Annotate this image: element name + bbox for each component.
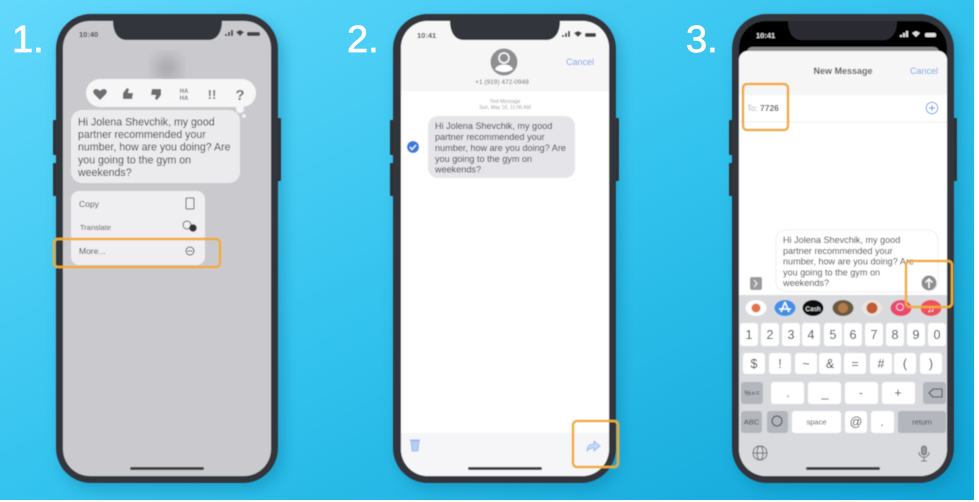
symbol row: ~ xyxy=(802,357,810,371)
context menu xyxy=(71,191,205,265)
step number 3: 3. xyxy=(686,19,718,61)
highlight: More option xyxy=(54,239,220,267)
message timestamp xyxy=(479,99,531,111)
icon: trash xyxy=(410,440,420,451)
app row xyxy=(746,300,942,316)
phone 2: message selected xyxy=(390,14,621,490)
number row: 8 xyxy=(892,328,899,342)
composed message xyxy=(776,230,938,292)
composed message: number, how are you doing? Are xyxy=(783,256,914,266)
bottom key row: . xyxy=(880,415,884,429)
message bubble: number, how are you doing? Are xyxy=(78,142,231,154)
symbol row: # xyxy=(878,357,885,371)
selected check xyxy=(407,141,419,153)
highlight: forward button xyxy=(573,421,618,467)
symbol row xyxy=(743,353,942,374)
number row: 4 xyxy=(808,328,815,342)
step number 2: 2. xyxy=(347,19,379,61)
recipient field: To: xyxy=(747,104,758,113)
message timestamp: Sun, May 16, 11:06 AM xyxy=(479,105,531,111)
punctuation row: - xyxy=(859,386,863,400)
message bubble: number, how are you doing? Are xyxy=(435,143,566,153)
punctuation row: + xyxy=(894,386,902,400)
phone 1: message context menu: 10:40 xyxy=(79,30,98,39)
number row: 5 xyxy=(830,328,837,342)
message bubble: Hi Jolena Shevchik, my good xyxy=(435,121,552,131)
phone 1: message context menu xyxy=(53,14,284,490)
phone 3: new message compose xyxy=(729,14,960,490)
number row: 3 xyxy=(788,328,795,342)
bottom key row: return xyxy=(912,418,932,426)
phone 2: message selected: 10:41 xyxy=(417,31,436,40)
home indicator xyxy=(468,467,542,470)
composed message: weekends? xyxy=(782,278,829,288)
punctuation row: _ xyxy=(821,386,830,400)
app row: ♫ xyxy=(927,304,935,315)
message bubble: weekends? xyxy=(77,167,132,179)
number row xyxy=(740,323,946,346)
composed message: partner recommended your xyxy=(783,246,893,256)
highlight: recipient field xyxy=(743,84,788,130)
blurred contact avatar xyxy=(154,55,180,81)
cancel link: Cancel xyxy=(910,66,938,76)
message bubble xyxy=(71,110,240,183)
keyboard xyxy=(739,295,947,476)
number row: 6 xyxy=(850,328,857,342)
reaction bar: HA xyxy=(180,96,189,102)
icon: expand apps xyxy=(750,277,762,290)
header with contact: Cancel xyxy=(566,57,594,67)
symbol row: = xyxy=(851,357,859,371)
number row: 1 xyxy=(746,328,753,342)
icon: globe xyxy=(753,446,767,460)
reaction bar xyxy=(86,79,256,118)
punctuation row: . xyxy=(786,386,790,400)
recipient field xyxy=(747,102,938,114)
icon: forward arrow xyxy=(587,441,600,451)
app row: Cash xyxy=(805,306,821,313)
reaction bar: HA xyxy=(180,89,189,95)
context menu: More... xyxy=(79,246,105,256)
symbol row: & xyxy=(826,357,835,371)
home indicator xyxy=(806,467,880,470)
compose sheet xyxy=(739,51,947,476)
phone 3: new message compose: 10:41 xyxy=(756,31,775,40)
message bubble: weekends? xyxy=(434,164,481,174)
punctuation row xyxy=(741,382,946,404)
message bubble: you going to the gym on xyxy=(435,154,532,164)
header with contact xyxy=(401,21,609,91)
sheet title: New Message xyxy=(813,66,873,76)
icon: microphone xyxy=(919,446,929,461)
message timestamp: Text Message xyxy=(490,99,521,105)
message bubble: partner recommended your xyxy=(435,132,545,142)
bottom key row: space xyxy=(806,418,827,426)
home indicator xyxy=(130,467,204,470)
symbol row: ) xyxy=(929,357,933,371)
bottom key row xyxy=(741,411,946,433)
highlight: send button xyxy=(906,261,952,307)
header with contact: +1 (919) 472-0948 xyxy=(475,79,529,86)
punctuation row: %+= xyxy=(744,388,760,398)
symbol row: $ xyxy=(751,357,758,371)
recipient field: 7726 xyxy=(760,103,779,113)
composed message: Hi Jolena Shevchik, my good xyxy=(783,235,900,245)
number row: 9 xyxy=(913,328,920,342)
number row: 2 xyxy=(767,328,774,342)
message bubble: Hi Jolena Shevchik, my good xyxy=(78,116,215,128)
number row: 0 xyxy=(934,328,941,342)
bottom key row: @ xyxy=(850,415,862,429)
bottom toolbar xyxy=(401,433,609,476)
symbol row: ( xyxy=(903,357,908,371)
reaction bar: ? xyxy=(235,87,245,104)
context menu: Copy xyxy=(79,199,100,209)
symbol row: ! xyxy=(778,357,782,371)
bottom key row: ABC xyxy=(744,418,760,426)
message bubble: partner recommended your xyxy=(78,129,206,141)
message bubble: you going to the gym on xyxy=(78,154,191,166)
context menu: Translate xyxy=(80,223,111,232)
message bubble xyxy=(428,116,575,178)
number row: 7 xyxy=(871,328,878,342)
reaction bar: !! xyxy=(208,87,216,102)
step number 1: 1. xyxy=(12,19,44,61)
composed message: you going to the gym on xyxy=(783,268,880,278)
